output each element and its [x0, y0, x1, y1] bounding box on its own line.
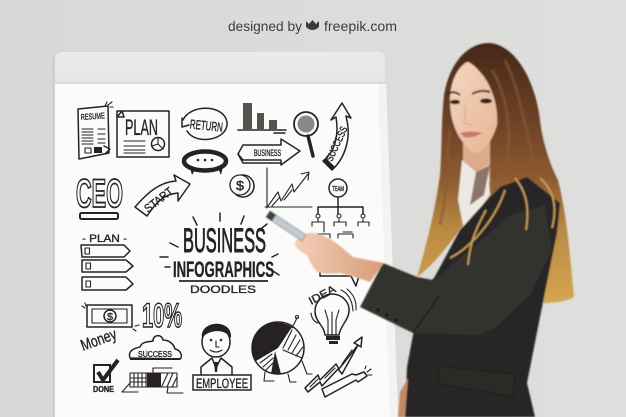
- neck: [463, 140, 490, 182]
- marker pen: [266, 211, 306, 241]
- doodle: plan sheet: PLAN: [125, 115, 158, 140]
- face: [450, 62, 497, 153]
- hair back: [417, 43, 574, 303]
- watermark: designed by freepik.com: [228, 19, 397, 34]
- doodle: zigzag arrow: [305, 337, 362, 392]
- doodle: plan list: - PLAN -: [82, 233, 127, 245]
- title: Business Infographics Doodles: DOODLES: [190, 284, 256, 296]
- doodle: team org chart: [312, 179, 369, 238]
- doodle: coin: [230, 175, 254, 197]
- doodle: done check: [93, 360, 118, 394]
- title: Business Infographics Doodles: BUSINESS: [183, 222, 266, 260]
- hand and forearm: [295, 233, 384, 282]
- hair streaks: [440, 60, 535, 225]
- doodle: success arrow: [323, 103, 351, 170]
- doodle: pie chart: [252, 316, 312, 382]
- doodle: success cloud: SUCCESS: [138, 350, 172, 359]
- doodle: segmented bar: [122, 368, 183, 393]
- doodle: money bill: [82, 303, 139, 331]
- doodle: business arrow: [238, 139, 300, 165]
- doodle: business arrow: BUSINESS: [254, 148, 281, 158]
- doodle: employee: [193, 324, 251, 391]
- doodle: idea bulb: IDEA: [307, 283, 339, 308]
- eyes and mouth: [447, 91, 492, 138]
- cuff buttons: [375, 307, 399, 323]
- shirt: [458, 160, 490, 230]
- sleeve shadow seam: [413, 262, 450, 333]
- doodle: start arrow: [135, 175, 190, 216]
- jacket body: [405, 177, 560, 417]
- lower leg skin: [398, 378, 408, 417]
- doodle: money word: Money: [79, 326, 119, 355]
- doodle: team org chart: TEAM: [332, 186, 344, 193]
- title: Business Infographics Doodles: [160, 213, 279, 296]
- doodle: CEO: CEO: [76, 172, 123, 216]
- doodle: CEO: [76, 172, 123, 219]
- doodle: resume: RESUME: [80, 110, 105, 122]
- doodle: idea bulb: [307, 283, 356, 344]
- doodle: success arrow: SUCCESS: [324, 125, 350, 163]
- doodle: success cloud: [129, 336, 181, 360]
- watermark: designed by freepik.com: designed by: [228, 19, 302, 34]
- doodle: magnifier: [294, 112, 318, 156]
- doodle: plan list: [81, 233, 133, 290]
- doodle: start arrow: START: [142, 186, 176, 215]
- doodle: pencil: [322, 366, 372, 397]
- watermark: designed by freepik.com: freepik.com: [324, 19, 397, 34]
- doodle: 10 percent: 10%: [142, 297, 182, 335]
- doodle: resume: [78, 102, 113, 159]
- doodle: line graph: [265, 168, 312, 208]
- shirt tie shadow: [470, 165, 490, 205]
- doodle: speech bubble: [184, 152, 226, 175]
- doodle: money bill: $: [107, 312, 113, 323]
- doodle: return: [182, 108, 227, 140]
- jacket sleeve: [360, 205, 552, 335]
- doodles: [76, 102, 372, 397]
- woman presenter: [266, 43, 574, 417]
- doodle: speech bubble behind hand: [320, 272, 366, 286]
- doodle: employee: EMPLOYEE: [196, 376, 248, 391]
- title: Business Infographics Doodles: INFOGRAPHICS: [173, 257, 274, 282]
- flip chart board: [52, 52, 398, 417]
- doodle: bar chart: [238, 103, 286, 133]
- doodle: coin: $: [236, 178, 245, 193]
- doodle: return: RETURN: [189, 116, 224, 135]
- jacket pocket: [438, 366, 515, 397]
- doodle: done check: DONE: [93, 385, 115, 394]
- hair blonde strands over jacket: [450, 178, 555, 265]
- doodle: plan sheet: [117, 111, 169, 157]
